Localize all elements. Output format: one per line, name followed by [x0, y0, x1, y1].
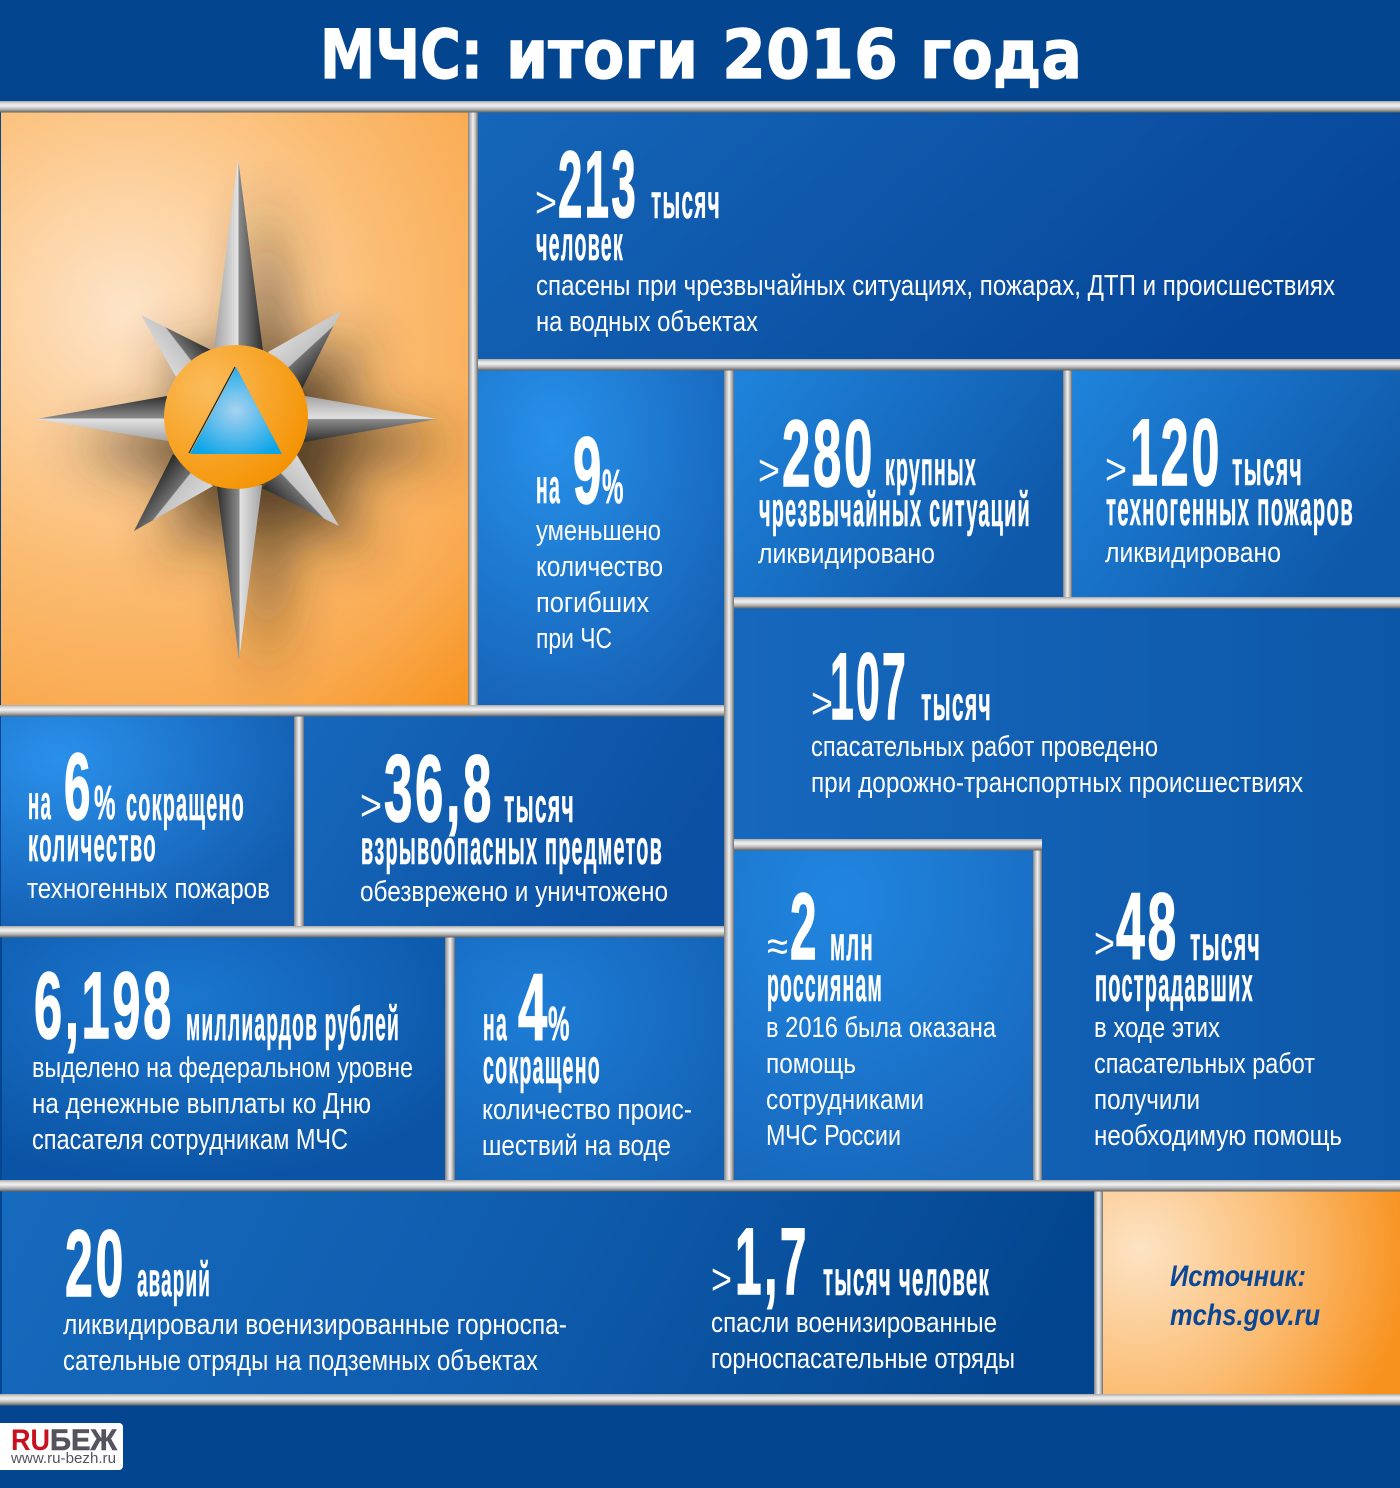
- title: МЧС:: [320, 16, 483, 95]
- panel: 280 emergencies: [734, 370, 1063, 598]
- panel: 36.8 thousand explosives: 36,8: [384, 736, 494, 842]
- logo: RUBEZH: www.ru-bezh.ru: [10, 1450, 116, 1467]
- panel: 107 thousand rescue operations: при дорожно-транспортных происшествиях: [811, 767, 1303, 799]
- panel: 6 percent fires: сокращено: [126, 778, 245, 831]
- panel: 36.8 thousand explosives: >: [360, 781, 382, 830]
- panel: 120 thousand fires: тысяч: [1232, 443, 1303, 496]
- icon: star emblem: [36, 158, 465, 686]
- panel: 120 thousand fires: 120: [1130, 400, 1222, 506]
- panel: 6.198 billion rubles: 6,198: [34, 953, 174, 1059]
- panel: 2 million assisted: 2: [790, 874, 819, 980]
- panel: 9 percent: %: [602, 461, 625, 514]
- panel: 9 percent: на: [536, 461, 561, 514]
- panel: 6 percent fires: техногенных пожаров: [27, 873, 270, 905]
- panel: mine rescue: >: [711, 1255, 732, 1304]
- title: 2016: [722, 16, 898, 95]
- panel: 280 emergencies: >: [758, 446, 780, 495]
- panel: emblem: [1, 112, 468, 706]
- panel: 6 percent fires: количество: [28, 819, 157, 872]
- panel: 2 million assisted: помощь: [766, 1048, 856, 1080]
- panel: 36.8 thousand explosives: [304, 716, 724, 927]
- panel: 120 thousand fires: ликвидировано: [1105, 537, 1281, 569]
- logo: RUBEZH: БЕЖ: [50, 1424, 118, 1457]
- panel: 4 percent water incidents: [455, 937, 724, 1181]
- panel: 4 percent water incidents: сокращено: [483, 1041, 601, 1094]
- panel: mine rescue: сательные отряды на подземных объектах: [63, 1345, 538, 1377]
- panel: 213 thousand rescued: тысяч: [651, 176, 721, 229]
- panel: 2 million assisted: МЧС России: [766, 1120, 901, 1152]
- panel: mine rescue: [2, 1191, 1094, 1395]
- panel: 2 million assisted: в 2016 была оказана: [766, 1012, 997, 1044]
- panel: 213 thousand rescued: на водных объектах: [536, 306, 758, 338]
- panel: 107 thousand rescue operations: спасательных работ проведено: [811, 731, 1158, 763]
- panel: 213 thousand rescued: человек: [536, 218, 624, 271]
- panel: 36.8 thousand explosives: обезврежено и уничтожено: [360, 876, 668, 908]
- panel: 107 thousand rescue operations: [734, 608, 1400, 1180]
- panel: 6.198 billion rubles: на денежные выплаты ко Дню: [32, 1088, 371, 1120]
- panel: 9 percent: 9: [573, 418, 604, 524]
- panel: 6.198 billion rubles: выделено на федеральном уровне: [32, 1052, 413, 1084]
- panel: 9 percent: погибших: [536, 587, 649, 619]
- panel: 9 percent: уменьшено: [536, 515, 661, 547]
- panel: 280 emergencies: 280: [782, 401, 875, 507]
- panel: 6.198 billion rubles: [2, 937, 445, 1181]
- footer band: [0, 1406, 1400, 1488]
- panel: mine rescue: ликвидировали военизированные горноспа-: [63, 1309, 567, 1341]
- panel: 120 thousand fires: [1072, 370, 1400, 598]
- title: [320, 16, 1082, 95]
- panel: 120 thousand fires: >: [1105, 445, 1127, 494]
- panel: 4 percent water incidents: на: [483, 998, 508, 1051]
- panel: 6 percent fires: %: [94, 777, 117, 830]
- panel: 6 percent fires: 6: [64, 734, 93, 840]
- panel: 6 percent fires: на: [28, 777, 52, 830]
- panel: 107 thousand rescue operations: тысяч: [921, 678, 992, 731]
- panel: 9 percent: [478, 370, 724, 706]
- panel: 2 million assisted: млн: [830, 918, 874, 971]
- panel: 48 thousand injured: 48: [1116, 874, 1179, 980]
- logo: RUBEZH: [0, 1423, 123, 1470]
- title: итоги: [506, 16, 698, 95]
- panel: 2 million assisted: россиянам: [767, 959, 883, 1012]
- panel: 107 thousand rescue operations: 107: [830, 634, 908, 740]
- panel: mine rescue: аварий: [137, 1254, 211, 1307]
- panel: 48 thousand injured: тысяч: [1190, 918, 1261, 971]
- panel: 9 percent: при ЧС: [536, 623, 612, 655]
- panel: 4 percent water incidents: 4: [518, 955, 550, 1061]
- text: взрывоопасных предметов: [361, 822, 663, 875]
- panel: 48 thousand injured: в ходе этих: [1094, 1012, 1220, 1044]
- panel: 2 million assisted: сотрудниками: [766, 1084, 924, 1116]
- text: миллиардов рублей: [186, 998, 400, 1051]
- panel: 48 thousand injured: необходимую помощь: [1094, 1120, 1342, 1152]
- panel: 4 percent water incidents: %: [548, 998, 571, 1051]
- panel: 6 percent fires: [1, 716, 294, 927]
- panel: 213 thousand rescued: 213: [558, 132, 638, 238]
- panel: 48 thousand injured: [1094, 874, 1342, 1152]
- panel: 2 million assisted: ≈: [767, 922, 788, 971]
- title: года: [920, 16, 1082, 95]
- panel: source: [1103, 1191, 1400, 1395]
- panel: 48 thousand injured: спасательных работ: [1094, 1048, 1315, 1080]
- panel: 48 thousand injured: >: [1094, 919, 1115, 968]
- panel: 107 thousand rescue operations: >: [811, 679, 833, 728]
- panel: mine rescue: тысяч человек: [823, 1253, 990, 1306]
- panel: mine rescue: 1,7: [735, 1209, 809, 1315]
- panel: 2 million assisted: [734, 850, 1033, 1180]
- panel: 4 percent water incidents: количество проис-: [482, 1094, 692, 1126]
- panel: 213 thousand rescued: [478, 112, 1400, 360]
- panel: 6.198 billion rubles: спасателя сотрудникам МЧС: [32, 1124, 348, 1156]
- panel: 9 percent: количество: [536, 551, 663, 583]
- panel: source: mchs.gov.ru: [1170, 1299, 1320, 1332]
- panel: source: Источник:: [1170, 1260, 1306, 1293]
- panel: mine rescue: горноспасательные отряды: [711, 1343, 1015, 1375]
- panel: 213 thousand rescued: >: [535, 178, 557, 227]
- panel: 280 emergencies: ликвидировано: [758, 538, 935, 570]
- logo: RUBEZH: RU: [11, 1424, 50, 1457]
- text: чрезвычайных ситуаций: [759, 484, 1031, 537]
- panel: mine rescue: 20: [65, 1211, 126, 1317]
- panel: 48 thousand injured: получили: [1094, 1084, 1200, 1116]
- panel: 280 emergencies: крупных: [885, 443, 977, 496]
- panel: 36.8 thousand explosives: тысяч: [504, 780, 575, 833]
- panel: mine rescue: спасли военизированные: [711, 1307, 997, 1339]
- panel: 4 percent water incidents: шествий на воде: [482, 1130, 671, 1162]
